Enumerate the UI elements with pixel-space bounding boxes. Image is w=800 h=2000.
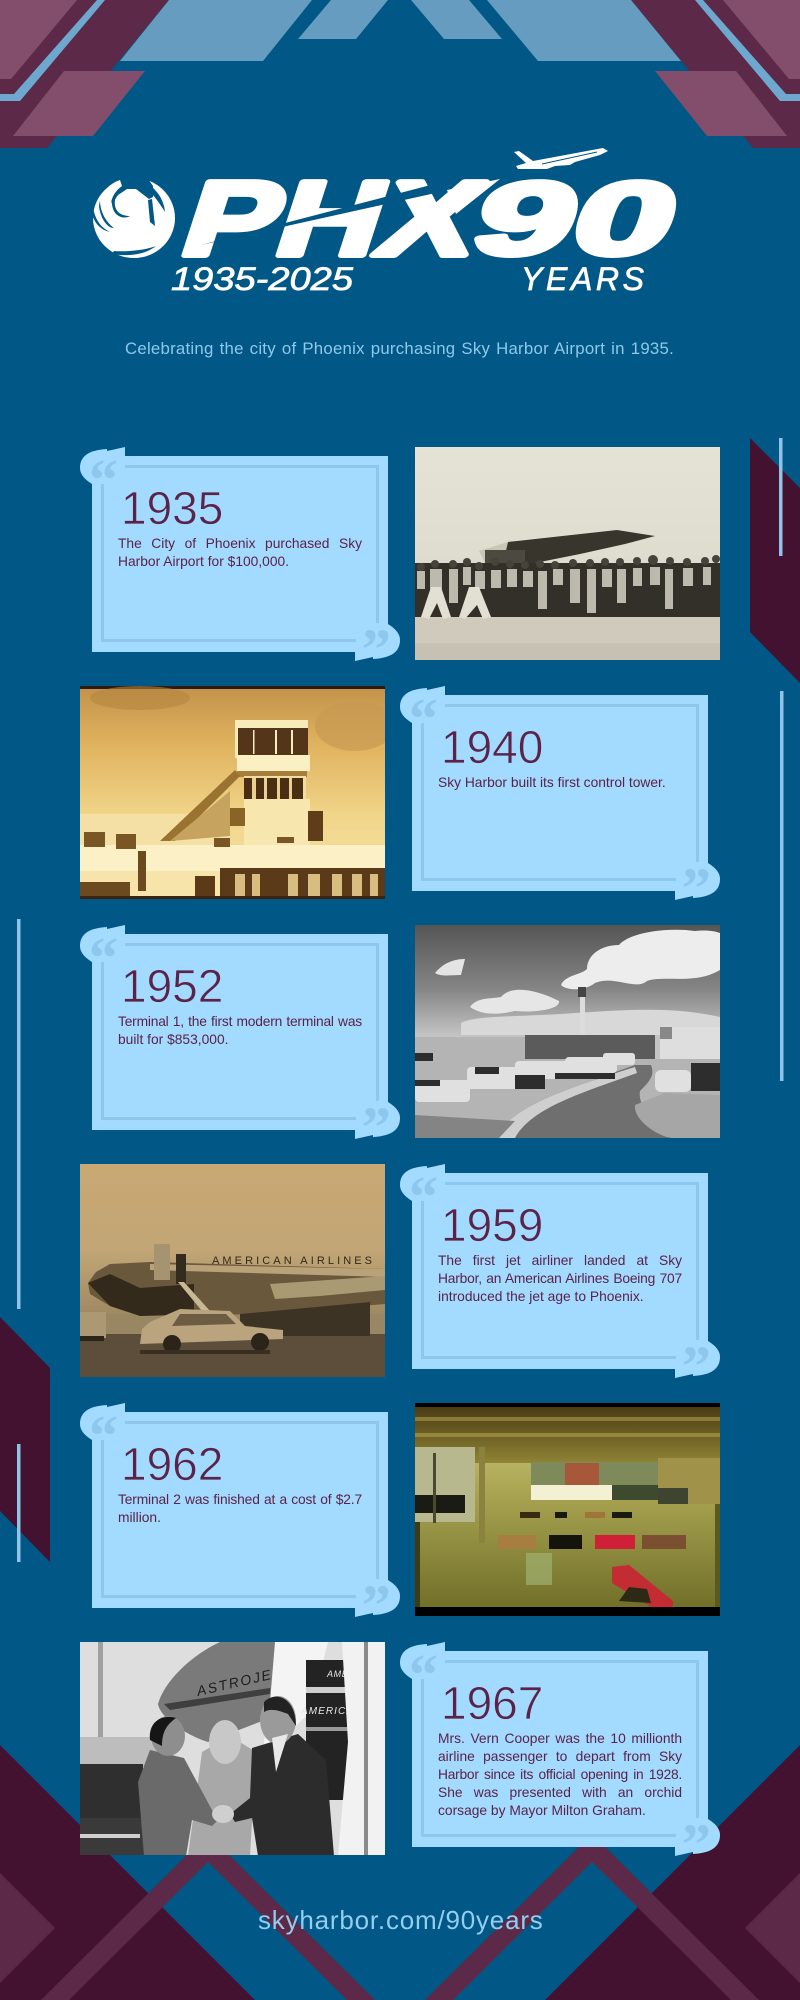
panel: 1967: She was presented with an orchid [438, 1785, 682, 1800]
wordmark: PHX: PHX [168, 160, 497, 278]
panel: 1967: corsage by Mayor Milton Graham. [438, 1803, 646, 1818]
panel: 1940 [400, 686, 720, 900]
panel: 1952: 1952 [121, 960, 223, 1012]
panel: 1959: Harbor, an American Airlines Boeing 707 [438, 1271, 682, 1286]
panel: 1935: 1935 [121, 482, 223, 534]
photo: crowd around airplane 1935 [415, 447, 720, 660]
panel: 1967: Mrs. Vern Cooper was the 10 millionth [438, 1731, 682, 1746]
subtitle: Celebrating the city of Phoenix purchasing Sky Harbor Airport in 1935. [125, 339, 674, 358]
wing slash through PHX [201, 181, 449, 245]
panel: 1952: “ [89, 925, 118, 990]
wordmark: 90: 90 [459, 161, 694, 276]
panel: 1935: The City of Phoenix purchased Sky [118, 536, 362, 551]
panel: 1952 [80, 925, 400, 1139]
panel: 1962: “ [362, 1552, 391, 1617]
panel: 1962: million. [118, 1510, 161, 1525]
photo: Mrs. Vern Cooper greeted at Astrojet stairs 1967: AMERICA [300, 1706, 353, 1717]
panel: 1952: “ [362, 1074, 391, 1139]
panel: 1967: airline passenger to depart from Sky [438, 1749, 682, 1764]
panel: 1940: “ [409, 686, 438, 751]
panel: 1935: Harbor Airport for $100,000. [118, 554, 289, 569]
panel: 1967: Harbor since its official opening in 1928. [438, 1767, 682, 1782]
panel: 1935: “ [362, 596, 391, 661]
photo: American Airlines Boeing 707 1959: AMERICAN AIRLINES [212, 1255, 372, 1267]
panel: 1967: “ [409, 1642, 438, 1707]
panel: 1967 [400, 1642, 720, 1856]
panel: 1962: 1962 [121, 1438, 223, 1490]
panel: 1959: The first jet airliner landed at Sky [438, 1253, 682, 1268]
panel: 1940: Sky Harbor built its first control tower. [438, 775, 666, 790]
panel: 1959: 1959 [441, 1199, 543, 1251]
icon: airplane [514, 148, 608, 169]
panel: 1959 [400, 1164, 720, 1378]
years range: 1935-2025 [171, 261, 353, 297]
photo: Mrs. Vern Cooper greeted at Astrojet stairs 1967: ASTROJET [194, 1664, 284, 1699]
panel: 1967: “ [682, 1791, 711, 1856]
panel: 1959: introduced the jet age to Phoenix. [438, 1289, 644, 1304]
panel: 1940: “ [682, 835, 711, 900]
years label: YEARS [521, 261, 644, 297]
panel: 1940: 1940 [441, 721, 543, 773]
panel: 1962: “ [89, 1403, 118, 1468]
photo: American Airlines Boeing 707 1959 [80, 1164, 385, 1377]
photo: Mrs. Vern Cooper greeted at Astrojet stairs 1967 [80, 1642, 385, 1855]
panel: 1959: “ [682, 1313, 711, 1378]
panel: 1959: “ [409, 1164, 438, 1229]
panel: 1962: Terminal 2 was finished at a cost of $2.7 [118, 1492, 362, 1507]
icon: phoenix emblem [92, 176, 175, 258]
panel: 1935: “ [89, 447, 118, 512]
photo: first control tower 1940 [80, 686, 385, 899]
logo: PHX 90 years [93, 148, 694, 297]
panel: 1935 [80, 447, 400, 661]
website link: skyharbor.com/90years [258, 1905, 544, 1935]
panel: 1952: built for $853,000. [118, 1032, 228, 1047]
panel: 1952: Terminal 1, the first modern terminal was [118, 1014, 362, 1029]
photo: Terminal 2 interior 1962 [415, 1403, 720, 1616]
photo: Terminal 1 with parked cars 1952 [415, 925, 720, 1138]
photo: Mrs. Vern Cooper greeted at Astrojet stairs 1967: AMERIC [326, 1669, 366, 1679]
panel: 1962 [80, 1403, 400, 1617]
panel: 1967: 1967 [441, 1677, 543, 1729]
